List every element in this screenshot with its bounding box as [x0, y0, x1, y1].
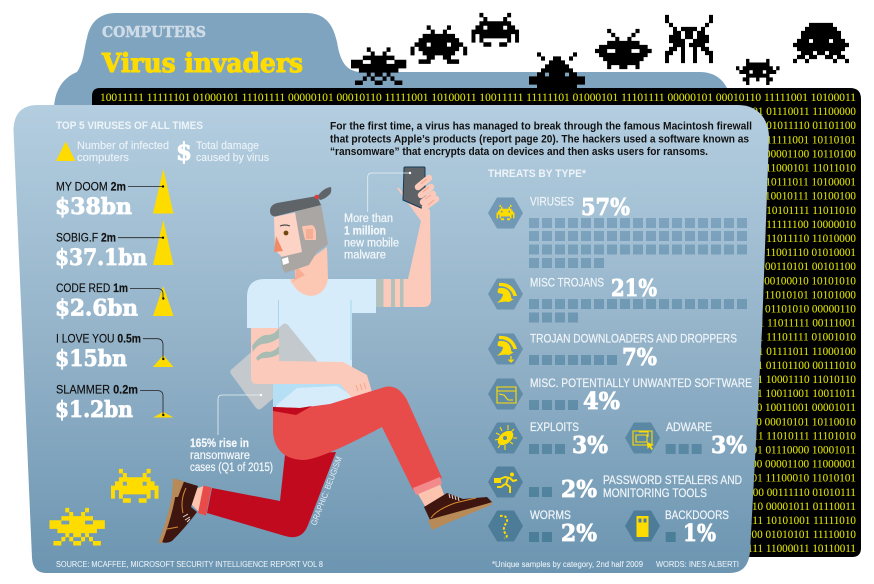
binary digits: 10100100 00111110 01010111 [719, 487, 856, 499]
virus: sobig.f [55, 220, 174, 271]
beard and side hair [281, 204, 328, 273]
virus: my doom [55, 169, 174, 220]
invader black 5 [595, 31, 652, 67]
black panel background [92, 88, 861, 557]
binary digits: 01010101 10010111 10100100 [718, 191, 856, 203]
binary digits: 10100111 11010111 11101010 [720, 430, 856, 442]
intro text block: “ransomware” that encrypts data on devices and then asks users for ransoms. [330, 146, 708, 158]
callout: mobile malware: More than [344, 213, 393, 225]
invader yellow crab [111, 471, 159, 500]
mouth [282, 257, 289, 265]
tablet [230, 324, 317, 410]
threat: backdoors: BACKDOORS [665, 510, 729, 522]
shirt fold lines [278, 300, 351, 360]
binary digits: 10101111 01101010 00000110 [719, 304, 856, 316]
threat: potentially unwanted software: 4% [583, 388, 620, 415]
legend: dollar [176, 137, 269, 166]
binary digits: 10101101 11111001 10110101 [719, 134, 856, 146]
virus: sobig.f: SOBIG.F 2m [56, 232, 116, 244]
threat: potentially unwanted software [488, 378, 752, 415]
binary digits: 10111101 11001110 01010001 [719, 247, 856, 259]
binary digits: 01101001 11000101 11011010 [719, 162, 856, 174]
back trouser cuff [198, 486, 212, 516]
virus: slammer: SLAMMER 0.2m [56, 384, 138, 396]
binary digits: 11010101 10101111 11011010 [719, 205, 856, 217]
virus: sobig.f: $37.1bn [55, 245, 147, 271]
threat: trojan downloaders: 7% [622, 344, 657, 371]
binary digits: 10100101 01110000 10001011 [718, 444, 856, 456]
threat: potentially unwanted software: MISC. POTENTIALLY UNWANTED SOFTWARE [530, 378, 752, 390]
binary digits: 10100101 10011001 10011011 [718, 388, 856, 400]
threat: viruses: VIRUSES [530, 196, 574, 208]
intro text block [330, 120, 752, 158]
threat: password stealers: 2% [561, 476, 597, 503]
virus: my doom: $38bn [55, 194, 132, 220]
legend: dollar: $ [176, 137, 192, 166]
threat: misc trojans [488, 275, 747, 318]
binary digits: 10011111 11111101 01000101 11101111 00000101 00010110 11111001 10100011 10011111 11111101 01000101 11101111 00000101 00010110 11111001 10100011 [100, 92, 856, 104]
threat: adware [625, 422, 747, 459]
binary code panel [92, 88, 861, 557]
threat: exploits [488, 422, 608, 459]
binary digits: 10100101 00110101 00101100 [718, 261, 856, 273]
binary digits [100, 92, 856, 555]
virus: my doom: MY DOOM 2m [56, 182, 126, 194]
threat: password stealers: PASSWORD STEALERS AND [603, 475, 742, 487]
red trousers [273, 387, 442, 490]
callout: ransomware: ransomware [190, 450, 250, 462]
callout: ransomware: 165% rise in [190, 438, 249, 450]
binary digits: 10100111 11101111 01001010 [720, 332, 856, 344]
binary digits: 10100111 11000011 10110011 [719, 543, 856, 555]
binary digits: 11010011 10001110 11010110 [719, 374, 856, 386]
threat: password stealers: MONITORING TOOLS [603, 488, 707, 500]
threat: worms: WORMS [530, 510, 571, 522]
virus: code red [55, 283, 174, 322]
heading: threats by type: THREATS BY TYPE* [488, 168, 587, 180]
threat: misc trojans: MISC TROJANS [530, 278, 604, 290]
nose [274, 236, 283, 252]
threat: adware: ADWARE [666, 422, 712, 434]
main light-blue panel [14, 105, 769, 573]
threat: viruses: 57% [581, 194, 630, 221]
virus: code red: CODE RED 1m [56, 283, 128, 295]
threat: trojan downloaders: TROJAN DOWNLOADERS AND DROPPERS [530, 334, 737, 346]
callout: ransomware [190, 394, 273, 474]
phone [403, 167, 425, 208]
threat: misc trojans: 21% [611, 275, 657, 302]
binary digits: 10100100 00001100 11000001 [718, 459, 856, 471]
binary digits: 11001011 00100010 10101010 [718, 275, 856, 287]
virus: slammer: $1.2bn [55, 397, 133, 423]
invader black 4 [529, 54, 585, 86]
intro text block: For the first time, a virus has managed to break through the famous Macintosh firewall [330, 120, 752, 132]
binary digits: 10011101 11011110 11010000 [720, 233, 856, 245]
panel: top 5 viruses [55, 120, 269, 423]
virus: i love you: $15bn [55, 346, 127, 372]
back shoe [160, 478, 198, 543]
virus: i love you [55, 334, 174, 372]
threat: trojan downloaders [488, 334, 737, 371]
front ankle [418, 484, 445, 508]
binary digits: 11010011 10111011 10100001 [719, 177, 856, 189]
shirt shadow [273, 380, 352, 408]
back ankle [190, 486, 204, 512]
callout: mobile malware: 1 million [344, 226, 386, 238]
back leg [207, 452, 336, 537]
binary digits: 11001001 01111011 11000100 [719, 346, 856, 358]
lower arm [251, 328, 372, 398]
threat: worms: 2% [561, 520, 597, 547]
threat: adware: 3% [711, 432, 747, 459]
binary digits: 11001010 00001100 10110100 [718, 148, 856, 160]
binary digits: 10001101 01011110 01101100 [719, 120, 856, 132]
hair tie [314, 195, 319, 199]
binary digits: 10100110 00001011 01110011 [719, 501, 856, 513]
footer: words credit: WORDS: INES ALBERTI [656, 559, 739, 569]
waist shadow [273, 406, 312, 415]
legend: dollar: caused by virus [196, 152, 269, 164]
invader black 1 [351, 50, 406, 83]
binary digits: 10100101 11100010 11010101 [718, 473, 856, 485]
binary digits: 10100100 00010101 10110010 [717, 416, 856, 428]
legend: triangle: Number of infected [77, 140, 169, 152]
hair [270, 196, 321, 216]
illustration: running man [160, 167, 493, 543]
threat: viruses [488, 194, 747, 263]
t-shirt [247, 279, 376, 412]
panel: threats by type [488, 168, 752, 547]
credit: graphic: GRAPHIC: BEUGISM [309, 455, 344, 527]
title: Virus invaders [101, 49, 303, 79]
binary digits: 10110101 01110011 11100000 [719, 106, 856, 118]
finger lines [356, 383, 366, 391]
binary digits: 10100111 10101001 11111010 [719, 515, 856, 527]
intro text block: that protects Apple’s products (report page 20). The hackers used a software known as [330, 134, 749, 146]
binary digits: 01011001 11111100 10000010 [719, 219, 856, 231]
threat: backdoors [625, 510, 729, 547]
callout: mobile malware: malware [344, 250, 386, 262]
fingers [418, 178, 436, 207]
invader black 2 [410, 28, 467, 62]
invader yellow saucer [50, 510, 105, 543]
section label: computers: COMPUTERS [102, 23, 206, 41]
back folder tab [54, 13, 729, 110]
threat: exploits: EXPLOITS [530, 422, 579, 434]
threat: backdoors: 1% [683, 520, 716, 547]
legend: triangle [56, 140, 169, 164]
legend: triangle: computers [77, 152, 129, 164]
threat: password stealers [488, 466, 742, 503]
footer: source: SOURCE: MCAFFEE, MICROSOFT SECURITY INTELLIGENCE REPORT VOL 8 [56, 559, 323, 569]
arm tattoo [252, 328, 279, 361]
invader black 3 [472, 15, 519, 44]
invader black 6 [665, 17, 713, 61]
front shoe [424, 493, 493, 530]
callout: mobile malware [344, 172, 411, 262]
callout: ransomware: cases (Q1 of 2015) [190, 462, 273, 474]
virus: code red: $2.6bn [55, 296, 138, 322]
binary digits: 10100101 11011111 00111001 [720, 318, 856, 330]
binary digits: 10100100 01010101 11110010 [718, 529, 856, 541]
callout: mobile malware: new mobile [344, 238, 399, 250]
footer: note: *Unique samples by category, 2nd half 2009 [492, 559, 643, 569]
legend: dollar: Total damage [196, 140, 259, 152]
raised arm [376, 188, 431, 307]
invader black 8 [793, 25, 849, 61]
ponytail [317, 187, 331, 200]
virus: i love you: I LOVE YOU 0.5m [56, 334, 141, 346]
binary digits: 10100100 10011001 00001011 [718, 402, 856, 414]
sleeve tattoo bands [376, 279, 404, 307]
ear [302, 225, 316, 240]
face [274, 212, 312, 264]
eye and eyebrow [280, 225, 290, 235]
front trouser cuff [413, 477, 442, 495]
threat: worms [488, 510, 597, 547]
threat: exploits: 3% [572, 432, 608, 459]
binary digits: 10001011 01101100 00111010 [719, 360, 856, 372]
virus: slammer [55, 384, 174, 423]
heading: top 5 viruses: TOP 5 VIRUSES OF ALL TIMES [56, 120, 203, 132]
binary digits: 10101101 11010101 10101000 [718, 289, 856, 301]
finger creases [421, 179, 434, 205]
neck [290, 247, 328, 296]
invader black 7 [736, 61, 780, 83]
